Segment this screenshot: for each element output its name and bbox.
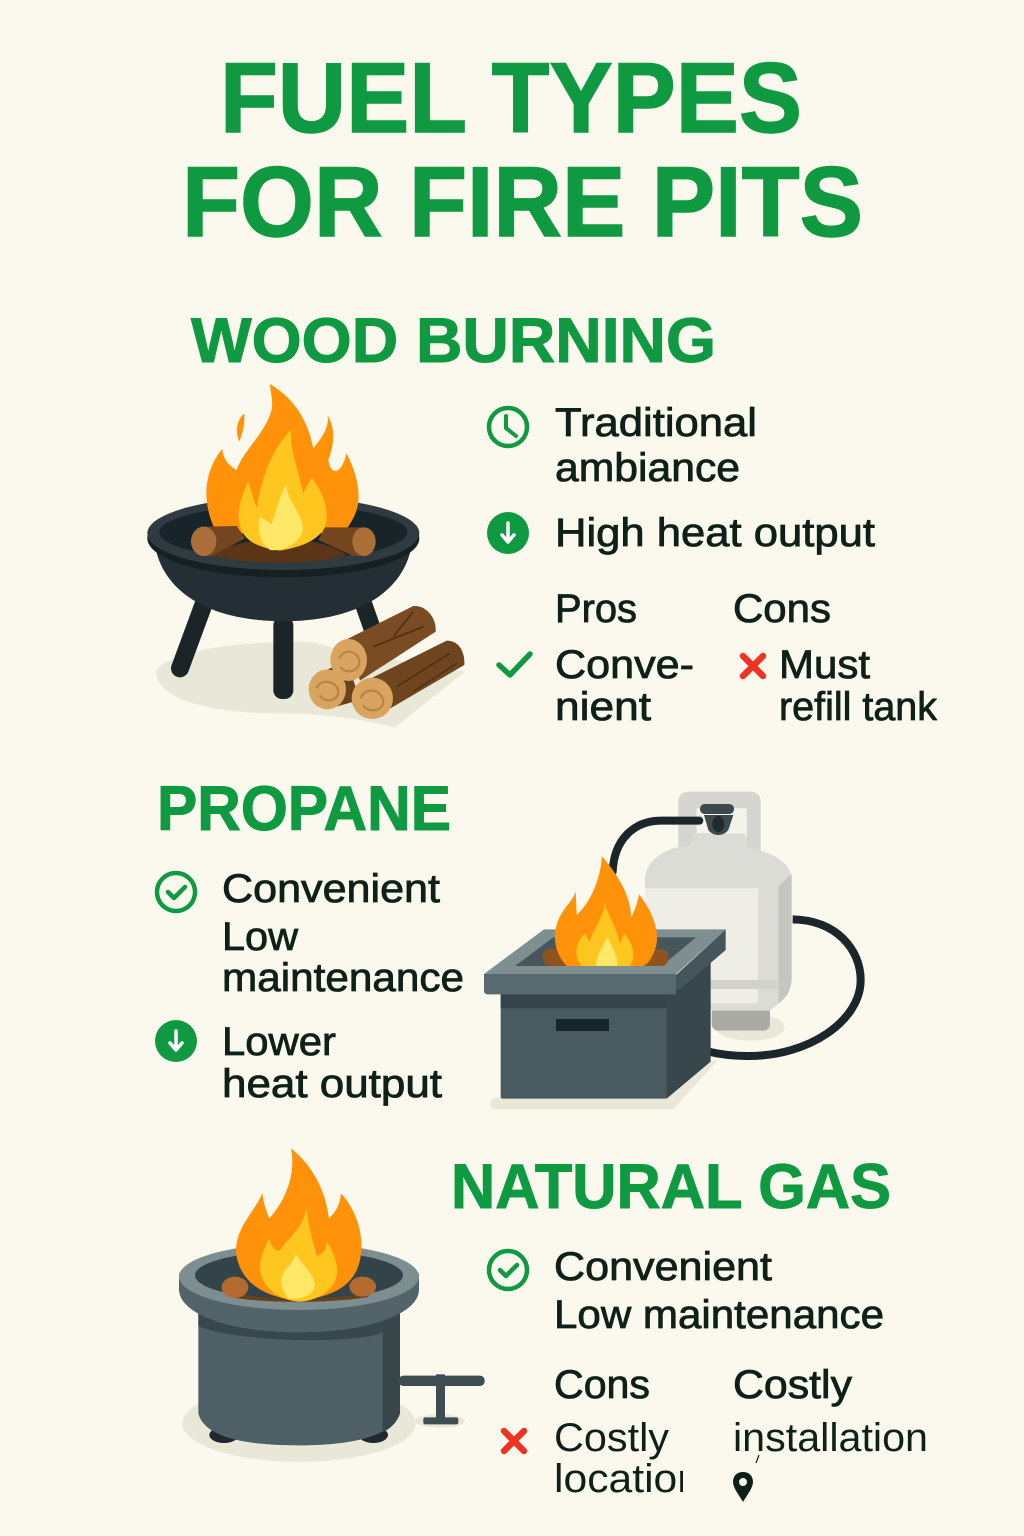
icon: check mark: [499, 654, 530, 675]
icon: red cross: [743, 656, 763, 676]
text: convenient low maintenance: maintenance: [222, 956, 464, 1000]
illustration: round natural gas fire pit: [179, 1148, 485, 1462]
heading: wood burning: WOOD BURNING: [191, 306, 716, 376]
heading: propane: PROPANE: [157, 774, 451, 844]
text: must refill tank con: [779, 643, 938, 729]
text: lower heat output: Lower: [222, 1020, 336, 1064]
text: cons heading: Cons: [733, 587, 831, 631]
title: FUEL TYPES: [220, 42, 802, 153]
text: high heat output: High heat output: [555, 511, 875, 555]
text: must refill tank con: refill tank: [779, 685, 938, 729]
text: must refill tank con: Must: [779, 643, 870, 687]
icon: red cross: [504, 1431, 524, 1451]
text: convenient low maintenance: [222, 867, 464, 1000]
heading: natural gas: NATURAL GAS: [451, 1152, 891, 1222]
text: convenient pro: [555, 643, 694, 729]
icon: clock: [489, 408, 527, 446]
text: convenient pro: nient: [555, 685, 651, 729]
text: convenient pro: Conve-: [555, 643, 694, 687]
text: pros heading: Pros: [555, 587, 637, 631]
icon: down arrow: [487, 512, 529, 554]
text: costly location: Costly: [554, 1416, 669, 1460]
mark: stray tick below installation: [756, 1455, 759, 1463]
text: lower heat output: heat output: [222, 1062, 442, 1106]
text: convenient low maintenance: Low: [222, 915, 298, 959]
infographic: [147, 62, 938, 1502]
text: convenient low maintenance: Convenient: [222, 867, 440, 911]
icon: location pin: [733, 1472, 753, 1502]
text: convenient low maintenance: Low maintenance: [554, 1293, 884, 1337]
text: traditional ambiance: [555, 401, 757, 490]
panel: natural gas: [179, 1148, 928, 1502]
text: cons heading: Cons: [554, 1363, 650, 1407]
text: installation: installation: [733, 1416, 928, 1460]
icon: check circle: [489, 1251, 527, 1289]
text: costly location: [556, 1422, 683, 1492]
panel: propane: [155, 774, 861, 1109]
text: costly location: location: [554, 1457, 701, 1501]
icon: check circle: [157, 873, 195, 911]
illustration: propane tank and square fire pit: [484, 792, 861, 1109]
title: FOR FIRE PITS: [182, 146, 863, 257]
illustration: wood fire pit with logs: [147, 384, 465, 727]
title: [182, 42, 863, 257]
icon: down arrow: [155, 1020, 197, 1062]
text: lower heat output: [222, 1020, 442, 1106]
panel: wood burning: [147, 306, 938, 729]
text: costly heading: Costly: [733, 1363, 852, 1407]
text: convenient low maintenance: [554, 1245, 884, 1337]
text: traditional ambiance: Traditional: [555, 401, 757, 445]
text: convenient low maintenance: Convenient: [554, 1245, 772, 1289]
text: traditional ambiance: ambiance: [555, 446, 740, 490]
